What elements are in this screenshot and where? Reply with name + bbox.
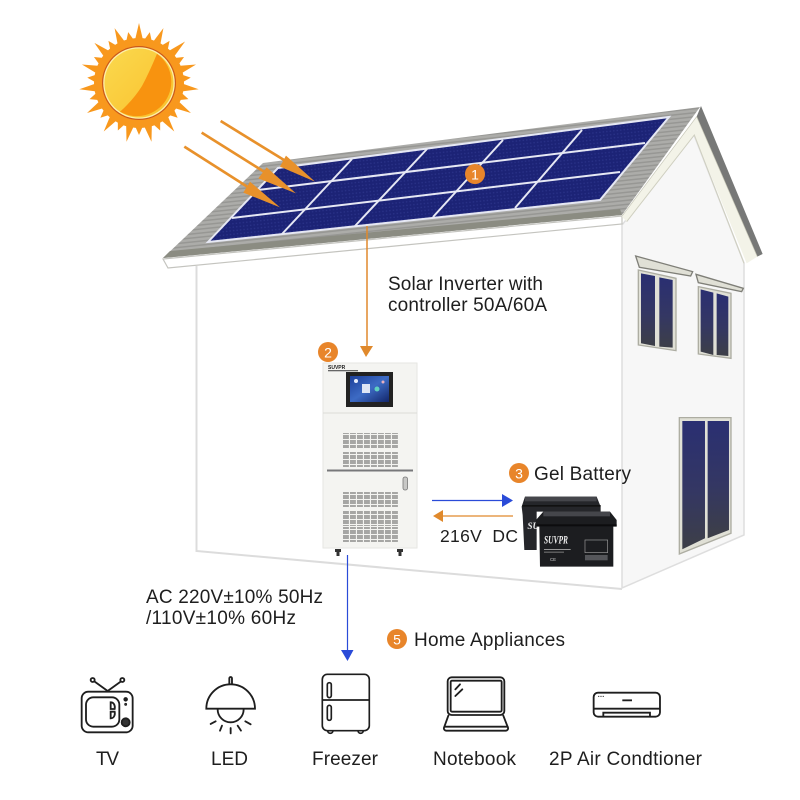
front battery: CE <box>550 557 556 562</box>
badge 3 <box>509 463 529 483</box>
front battery: SUVPR <box>544 534 568 546</box>
roof <box>163 107 700 258</box>
badge 5 <box>387 629 407 649</box>
label: AC output: AC 220V±10% 50Hz <box>146 587 323 608</box>
touch screen <box>346 372 393 407</box>
gable trim <box>622 106 763 263</box>
eave fascia <box>163 216 622 268</box>
brand text: SUVPR <box>328 365 346 371</box>
label: solar inverter <box>388 274 547 316</box>
vents <box>342 433 398 542</box>
icon: notebook <box>444 677 508 731</box>
label: home appliances: Home Appliances <box>414 630 565 651</box>
window 1 <box>636 256 693 351</box>
label: AC output <box>146 587 323 629</box>
appliance labels: LED <box>211 749 248 770</box>
label: AC output: /110V±10% 60Hz <box>146 608 296 629</box>
brand text <box>328 365 358 371</box>
badge 2 <box>318 342 338 362</box>
arrow: inverter to battery <box>432 494 513 507</box>
appliance labels: TV <box>96 749 119 770</box>
door <box>679 418 731 554</box>
label: 216V DC: 216V DC <box>440 526 518 546</box>
upper windows and door <box>636 256 743 554</box>
label: gel battery: Gel Battery <box>534 464 632 485</box>
appliance labels <box>96 749 703 770</box>
sun ray arrows <box>184 121 315 207</box>
icon: freezer <box>322 674 369 733</box>
icon: LED lamp <box>206 677 255 733</box>
arrow: panel to inverter <box>360 226 373 357</box>
door handle <box>403 477 408 490</box>
label: solar inverter: Solar Inverter with <box>388 274 543 295</box>
back battery: SU <box>527 522 541 532</box>
badge 3: 3 <box>515 466 523 482</box>
icon: air conditioner <box>594 693 660 717</box>
appliance labels: Freezer <box>312 749 379 770</box>
roof lower band <box>163 209 622 258</box>
label: solar inverter: controller 50A/60A <box>388 295 547 316</box>
badge 2: 2 <box>324 344 332 360</box>
badge 1: 1 <box>471 166 479 182</box>
gel batteries <box>522 497 617 567</box>
front battery <box>536 512 617 567</box>
house <box>163 106 763 589</box>
sun <box>79 23 199 143</box>
badge 1 <box>465 164 485 184</box>
appliance labels: Notebook <box>433 749 516 770</box>
badge 5: 5 <box>393 632 401 648</box>
window 2 <box>696 274 743 358</box>
house gable wall <box>622 135 744 588</box>
appliance labels: 2P Air Condtioner <box>549 749 703 770</box>
house left wall <box>196 224 622 589</box>
arrow: inverter to appliances <box>341 555 354 661</box>
arrow: battery to inverter <box>433 510 513 522</box>
inverter cabinet <box>323 363 417 556</box>
solar panel array <box>208 117 669 242</box>
icon: TV <box>82 678 133 732</box>
feet <box>335 549 403 556</box>
